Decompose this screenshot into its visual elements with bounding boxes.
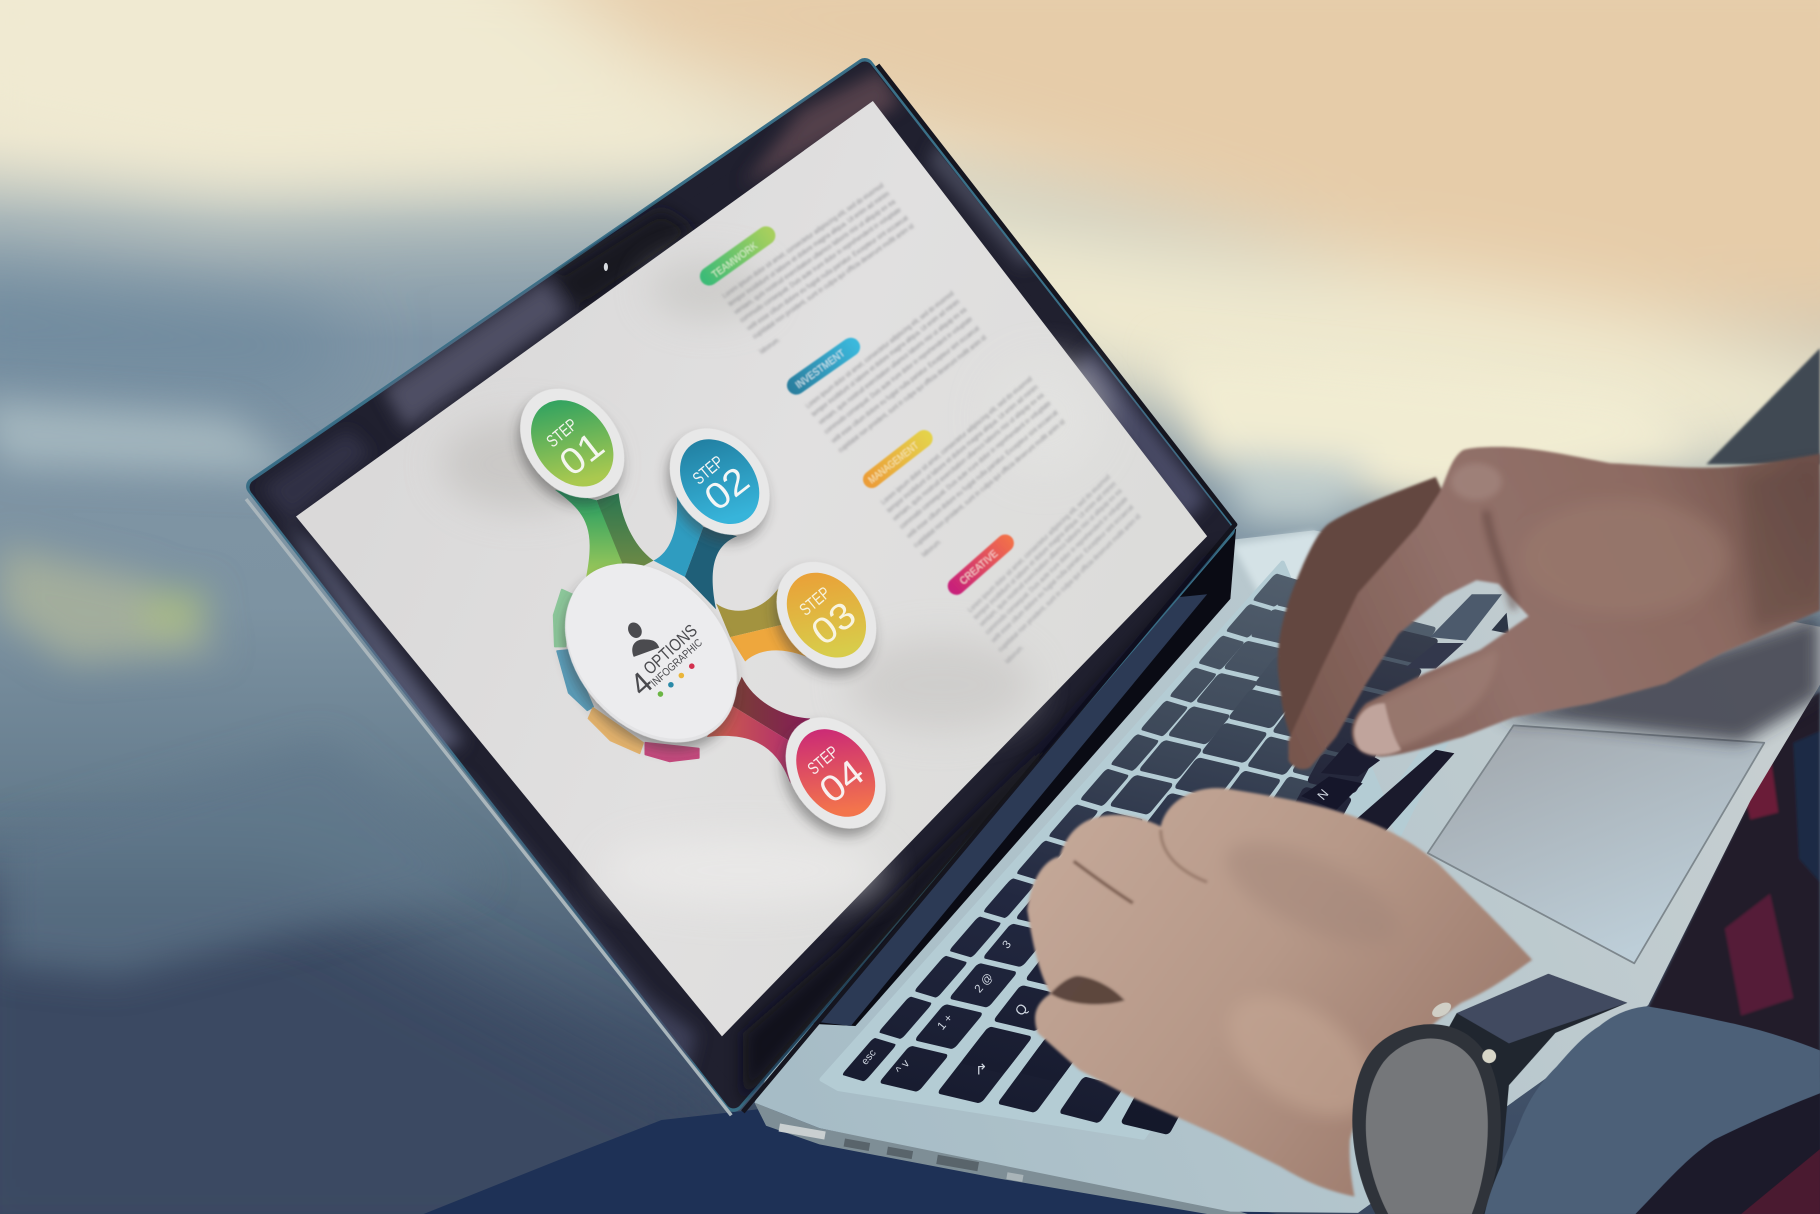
text block: investment: tempor incididunt ut labore et dolore magna aliqua. Ut enim ad minim [811, 298, 961, 418]
text block: teamwork [721, 182, 915, 356]
text block: teamwork: veniam, quis nostrud exercitation ullamco laboris nisi ut aliquip ex ea [733, 199, 897, 316]
panel: infographic connectors [555, 490, 810, 783]
jeans [424, 1108, 1277, 1214]
text block: investment: cupidatat non proident, sunt in culpa qui officia deserunt mollit anim id [837, 334, 988, 454]
screen [296, 101, 1207, 1036]
step 02: 02 [696, 458, 757, 519]
key legends: Q [1011, 1000, 1031, 1019]
text block: management: veniam, quis nostrud exercitation ullamco laboris nisi ut aliquip ex ea [892, 392, 1046, 523]
text block: management: tempor incididunt ut labore et dolore magna aliqua. Ut enim ad minim [886, 384, 1040, 515]
arc segments [554, 590, 699, 761]
camera dot [604, 263, 608, 271]
laptop lid [246, 65, 1235, 1115]
title text: OPTIONS [639, 620, 701, 678]
text block: creative: veniam, quis nostrud exercitation ullamco laboris nisi ut aliquip ex ea [978, 488, 1124, 628]
text block: creative: Lorem ipsum dolor sit amet, consectetur adipiscing elit, sed do eiusmod [967, 474, 1112, 614]
text block: teamwork: cupidatat non proident, sunt in culpa qui officia deserunt mollit anim id [752, 223, 915, 341]
label: management: MANAGEMENT [867, 440, 921, 486]
lower left hand [1027, 788, 1532, 1197]
upper right hand [1278, 447, 1820, 769]
text block: investment: Lorem ipsum dolor sit amet, consectetur adipiscing elit, sed do eiusmod [805, 290, 956, 410]
laptop hinge [808, 528, 1236, 1026]
dark right rim [743, 65, 1235, 1112]
step 03: 03 [803, 593, 864, 653]
thumb highlight [1359, 650, 1497, 752]
title text: INFOGRAPHIC [649, 637, 705, 689]
text block: management: commodo consequat. Duis aute irure dolor in reprehenderit in voluptate [899, 400, 1053, 531]
text block: management: Lorem ipsum dolor sit amet, consectetur adipiscing elit, sed do eiusmod [880, 376, 1034, 506]
dark ledge top right [1706, 348, 1820, 464]
step 03 [756, 542, 897, 688]
title text: 4 [623, 665, 660, 703]
step 03: STEP [795, 583, 834, 620]
key legends: 2 @ [972, 971, 996, 995]
center circle [530, 530, 772, 777]
key legends: W [1047, 956, 1066, 975]
step 04: 04 [811, 751, 872, 811]
text block: creative: velit esse cillum dolore eu fugiat nulla pariatur. Excepteur sint occaecat [990, 504, 1135, 644]
hand shadow on deck [1497, 615, 1820, 743]
step 01: STEP [542, 414, 581, 451]
thumbnail [1354, 703, 1401, 755]
text block: management: cupidatat non proident, sunt in culpa qui officia deserunt mollit anim id [913, 419, 1067, 549]
back of hand and thumb [1288, 447, 1820, 769]
side ports [779, 1123, 1024, 1182]
text block: creative: laborum. [1004, 644, 1026, 665]
label: teamwork: TEAMWORK [710, 241, 760, 281]
key legends [860, 786, 1331, 1079]
text block: management: velit esse cillum dolore eu fugiat nulla pariatur. Excepteur sint occaecat [906, 409, 1060, 540]
step 04 [765, 698, 906, 848]
legend dots [658, 663, 695, 697]
label: creative: CREATIVE [958, 548, 1000, 587]
text block: management: laborum. [921, 538, 943, 559]
text block: creative: tempor incididunt ut labore et dolore magna aliqua. Ut enim ad minim [973, 481, 1118, 621]
laptop base [754, 530, 1820, 1214]
key legends: esc [860, 1048, 879, 1067]
text block: investment: velit esse cillum dolore eu fugiat nulla pariatur. Excepteur sint occaecat [830, 325, 981, 445]
key legends: N [1314, 786, 1331, 803]
deck highlight top [1233, 532, 1335, 627]
key legends: ^ v [893, 1057, 912, 1077]
wrist watch [1352, 974, 1627, 1214]
text block: teamwork: Lorem ipsum dolor sit amet, consectetur adipiscing elit, sed do eiusmod [721, 182, 885, 300]
key legends: 1 + [935, 1011, 956, 1033]
title text [623, 620, 705, 703]
keyboard well [822, 563, 1509, 1137]
key legends: ↱ [975, 1062, 988, 1079]
step 02: STEP [689, 451, 727, 488]
step 01 [499, 368, 646, 519]
text block: creative: commodo consequat. Duis aute irure dolor in reprehenderit in voluptate [984, 496, 1130, 636]
text block: creative: cupidatat non proident, sunt in culpa qui officia deserunt mollit anim id [997, 513, 1142, 654]
middle finger [1278, 477, 1451, 743]
text block: teamwork: commodo consequat. Duis aute irure dolor in reprehenderit in voluptate [739, 207, 903, 324]
bezel reflections [261, 70, 1230, 1103]
text block: investment: veniam, quis nostrud exercitation ullamco laboris nisi ut aliquip ex ea [818, 306, 968, 426]
silver left edge [246, 499, 731, 1115]
step 04: STEP [803, 742, 842, 779]
trackpad [1428, 725, 1764, 963]
text block: investment: commodo consequat. Duis aute irure dolor in reprehenderit in voluptate [823, 316, 974, 436]
step 02 [649, 409, 790, 555]
shirt sleeve [1485, 1006, 1820, 1214]
label: investment: INVESTMENT [794, 348, 848, 391]
keyboard keys [842, 562, 1509, 1135]
text block: teamwork: laborum. [759, 337, 782, 356]
screen reflections [441, 261, 1103, 905]
step 01: 01 [551, 423, 612, 484]
text block: teamwork: tempor incididunt ut labore et dolore magna aliqua. Ut enim ad minim [727, 190, 891, 308]
icon: person [625, 620, 659, 657]
text block: teamwork: velit esse cillum dolore eu fugiat nulla pariatur. Excepteur sint occaecat [746, 215, 910, 332]
knuckle and back highlights [1451, 463, 1502, 500]
shirt plaid at right [1648, 692, 1820, 1079]
key legends: 3 [1000, 938, 1014, 951]
